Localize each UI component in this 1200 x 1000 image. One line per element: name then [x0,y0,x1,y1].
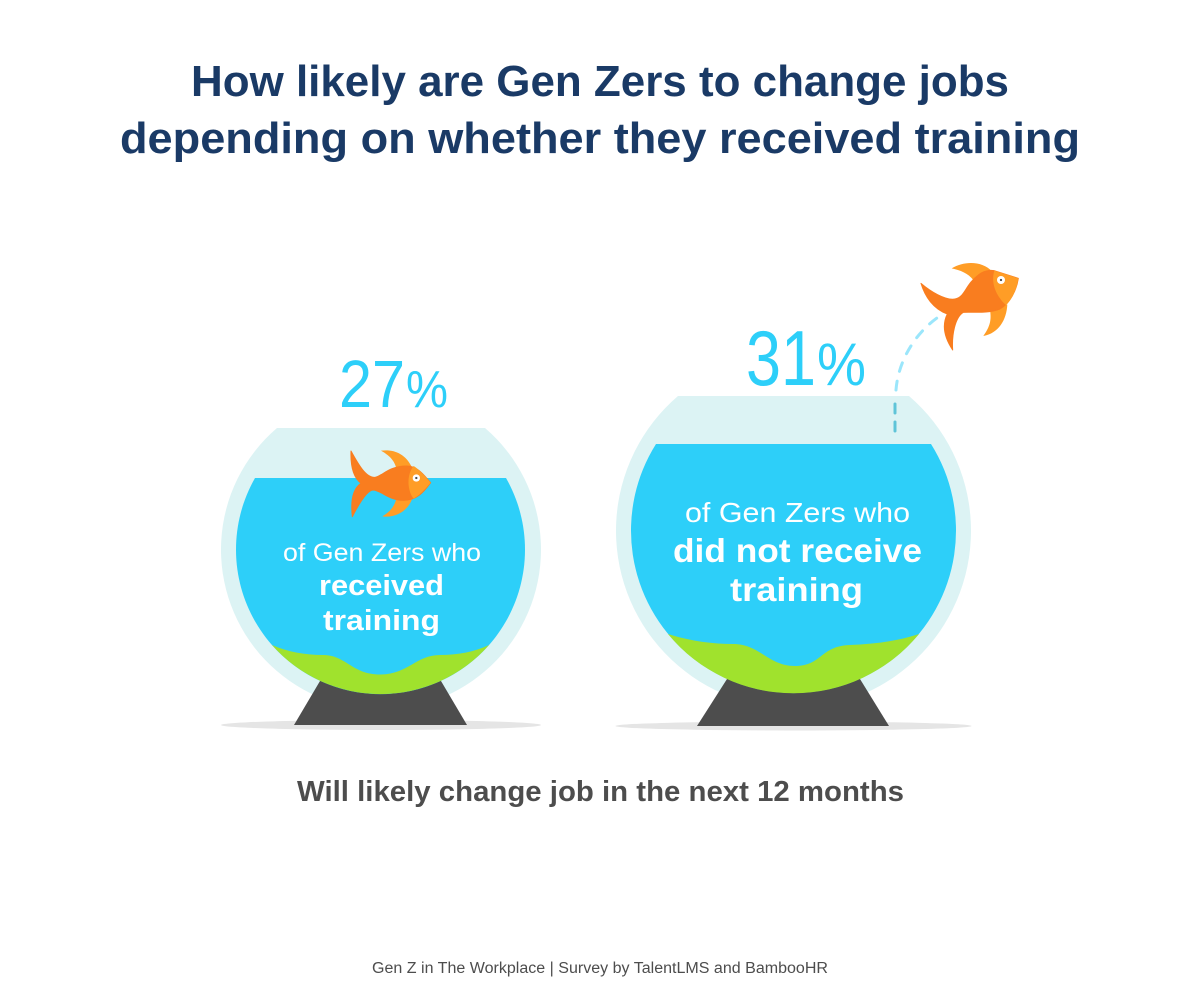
bowl label: training [730,571,863,608]
panel: fishbowl did not receive training [616,263,1018,730]
stat: 31%: % [817,331,866,398]
bowl stand [697,679,889,726]
stat: 27% [339,347,448,422]
title: depending on whether they received training [120,114,1080,163]
title [120,57,1080,163]
caption: Will likely change job in the next 12 months [297,776,904,808]
bowl label: of Gen Zers who [283,539,481,567]
title: How likely are Gen Zers to change jobs [191,57,1009,106]
bowl stand [294,681,467,725]
bowl label: of Gen Zers who [685,497,910,528]
bowl label: did not receive [673,532,922,569]
bowl shadow [221,720,541,730]
bowl label: training [323,605,440,637]
bowl shadow [616,722,972,730]
stat: 27%: 27 [339,347,405,422]
water [236,478,525,694]
bowl label [673,497,922,608]
stat: 31%: 31 [746,314,816,402]
jump trail inside bowl [894,398,896,431]
bowl label: received [319,570,444,602]
glass bowl [221,428,541,710]
gravel [272,645,489,694]
water [631,444,956,693]
source footer: Gen Z in The Workplace | Survey by TalentLMS and BambooHR [372,960,828,977]
stat: 27%: % [406,361,448,419]
icon: jumping fish [921,263,1018,350]
panel: fishbowl received training [221,347,541,730]
gravel [668,634,919,693]
icon: fish in bowl [351,450,431,517]
glass bowl [616,396,971,708]
jump trail outside bowl [896,314,943,390]
bowl label [283,539,481,637]
